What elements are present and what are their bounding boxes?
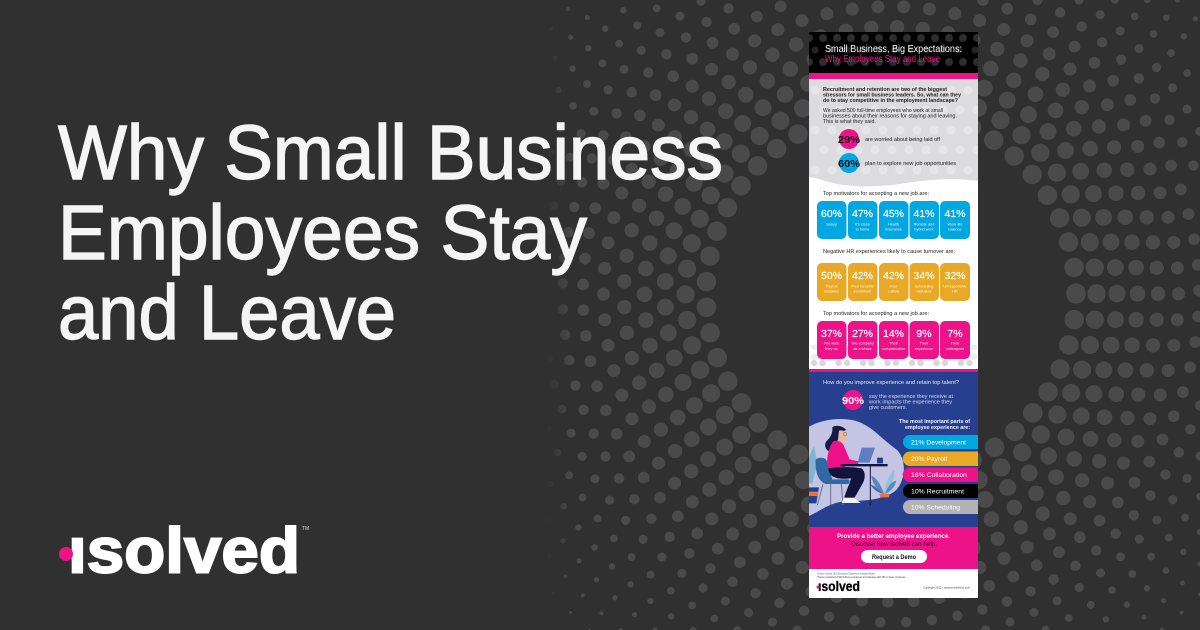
panel: header [809, 32, 978, 79]
panel: orange cards: 50% [821, 270, 842, 282]
footer: Copyright 2022 • www.isolvedhcm.com [923, 586, 970, 590]
panel: blue cards: 41% [913, 208, 935, 220]
panel: orange cards: Scheduling [915, 284, 933, 288]
intro bold text: do to stay competitive in the employment landscape? [823, 98, 959, 104]
intro text: This is what they said. [823, 119, 876, 125]
stat: 90%: give customers. [869, 405, 907, 411]
stat: 90% [842, 390, 953, 411]
panel: pink cards: colleagues [946, 347, 964, 351]
title: Why Small Business [58, 110, 723, 196]
panel: orange cards: Payroll [826, 284, 837, 288]
panel: pink cards: The company [851, 342, 874, 346]
panel: employee experience [809, 369, 978, 527]
heading: top motivators for staying: Top motivators for accepting a new job are: [823, 311, 929, 317]
panel: orange cards: mistakes [917, 290, 932, 294]
list: experience pills [903, 435, 978, 514]
panel: blue cards: balance [948, 228, 962, 232]
panel: orange cards: Poor [889, 284, 898, 288]
stat: 60%: 60% [838, 158, 861, 170]
panel: call to action: Provide a better employee experience. [837, 533, 950, 540]
logo: footer isolved: ısolved [818, 578, 860, 594]
panel: orange cards: enrollment [854, 290, 872, 294]
panel: blue cards: Health [888, 222, 899, 226]
panel: blue cards: 47% [852, 208, 873, 220]
list: experience pills: 10% Recruitment [911, 488, 964, 496]
stat: 90%: 90% [842, 395, 865, 407]
intro text: businesses about their reasons for staying and leaving. [823, 114, 957, 120]
illustration: woman at laptop [809, 419, 904, 516]
panel: pink cards: 27% [852, 328, 873, 340]
stat: 60% [838, 153, 956, 173]
panel: orange cards: 42% [883, 270, 904, 282]
heading: report title: Small Business, Big Expectations: [825, 44, 962, 55]
button: request a demo: Request a Demo [872, 555, 916, 561]
panel: blue cards: Remote and [914, 222, 934, 226]
heading: negative HR experiences: Negative HR experiences likely to cause turnover are: [823, 249, 955, 255]
heading: most important parts: The most important parts of [899, 419, 970, 425]
panel: blue cards: It's close [855, 222, 870, 226]
logo: isolved: TM [302, 526, 309, 532]
panel: pink cards: The work [824, 342, 839, 346]
panel: blue cards: Work-life [948, 222, 962, 226]
panel: pink cards: compensation [882, 347, 905, 351]
footer: *Survey conducted of 500 full-time employees at businesses with 250 or fewer employees. [817, 575, 906, 579]
panel: blue cards: to home [856, 228, 869, 232]
list: experience pills: 21% Development [911, 440, 966, 446]
stat: 29%: are worried about being laid off [865, 137, 940, 143]
panel: orange cards: HR [952, 290, 958, 294]
logo: isolved: ısolved [68, 514, 300, 586]
intro bold text: Recruitment and retention are two of the biggest [823, 87, 947, 93]
stat: 90%: say the experience they receive at [869, 394, 953, 400]
intro bold text: stressors for small business leaders. So, what can they [823, 92, 962, 98]
panel: orange cards: 42% [852, 270, 873, 282]
heading: improve experience: How do you improve experience and retain top talent? [823, 380, 960, 386]
heading: most important parts [899, 419, 970, 431]
button: request a demo [861, 550, 927, 563]
list: experience pills: 16% Collaboration [911, 472, 967, 479]
stat: 60%: plan to explore new job opportunities [865, 161, 956, 167]
stat: 90%: work impacts the experience they [868, 400, 952, 406]
panel: pink cards: 37% [821, 328, 842, 340]
panel: orange cards: culture [888, 290, 899, 294]
list: experience pills: 10% Scheduling [911, 504, 960, 512]
panel: pink cards: experience [915, 347, 933, 351]
footer: Source: isolved 2022 Employee Experience Insights Report [817, 572, 875, 576]
panel: call to action: Discover how isolved can help. [851, 541, 937, 548]
panel: blue cards: 45% [883, 208, 904, 220]
panel: blue cards: 41% [944, 208, 966, 220]
heading: most important parts: employee experience are: [905, 425, 970, 431]
stat: 29% [838, 129, 940, 149]
list: experience pills: 20% Payroll [911, 456, 947, 463]
title [58, 110, 723, 356]
panel: introduction [809, 79, 978, 186]
panel: orange cards: mistakes [824, 290, 839, 294]
intro text [823, 108, 957, 125]
panel: pink cards: 7% [947, 328, 963, 340]
panel: orange cards: Poor benefits [851, 284, 874, 288]
panel: pink cards: as a whole [853, 347, 872, 351]
panel: pink cards [817, 321, 970, 359]
panel: blue cards: Salary [826, 222, 837, 226]
panel: blue cards: 60% [821, 208, 842, 220]
panel: pink cards: Their [920, 342, 929, 346]
title: and Leave [58, 270, 396, 356]
heading: top motivators: Top motivators for accepting a new job are: [823, 191, 929, 197]
panel: pink cards: Their [889, 342, 899, 346]
panel: blue cards: hybrid work [914, 228, 934, 232]
panel: infographic [809, 32, 978, 598]
panel: orange cards: 34% [913, 270, 935, 282]
intro text: We asked 500 full-time employees who work at small [823, 108, 943, 114]
panel: call to action [809, 527, 978, 569]
panel: blue cards [817, 201, 970, 239]
panel: orange cards: 32% [944, 270, 966, 282]
panel: pink cards: Their [951, 342, 960, 346]
panel: pink cards: 9% [916, 328, 932, 340]
intro bold text [823, 87, 962, 104]
panel: pink cards: 14% [883, 328, 904, 340]
title: Employees Stay [58, 190, 587, 276]
footer [816, 572, 970, 594]
panel: pink cards: they do [825, 347, 838, 351]
panel: blue cards: insurance [885, 228, 902, 232]
stat: 29%: 29% [838, 134, 861, 146]
panel: orange cards: Unresponsive [943, 284, 967, 288]
panel: orange cards [817, 263, 970, 301]
heading: report subtitle: Why Employees Stay and Leave [825, 54, 940, 65]
